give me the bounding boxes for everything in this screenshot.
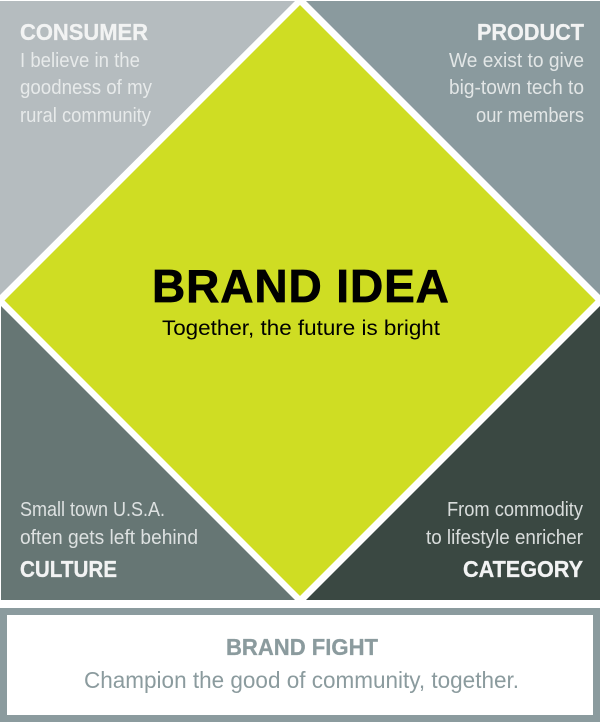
- text: product statement: big-town tech to: [449, 77, 584, 99]
- text: product statement: [449, 50, 584, 127]
- heading: brand fight: BRAND FIGHT: [226, 634, 378, 660]
- title: brand idea: BRAND IDEA: [152, 260, 450, 312]
- text: consumer statement: goodness of my: [20, 77, 152, 99]
- text: category statement: From commodity: [447, 499, 583, 521]
- text: product statement: We exist to give: [449, 50, 584, 72]
- text: consumer statement: [20, 50, 152, 127]
- text: culture statement: [20, 499, 198, 549]
- panel: consumer: [0, 1, 295, 295]
- heading: product: PRODUCT: [477, 19, 584, 45]
- panel: culture: [1, 306, 295, 600]
- heading: consumer: CONSUMER: [20, 19, 148, 45]
- subtitle: brand idea statement: Together, the future is bright: [162, 317, 440, 340]
- heading: category: CATEGORY: [463, 556, 583, 582]
- text: consumer statement: I believe in the: [20, 50, 140, 72]
- heading: culture: CULTURE: [20, 556, 117, 582]
- panel: category: [306, 306, 600, 600]
- text: category statement: [426, 499, 583, 549]
- text: product statement: our members: [476, 105, 584, 127]
- text: brand fight statement: Champion the good of community, together.: [84, 667, 519, 693]
- panel: brand fight: [4, 612, 596, 718]
- text: culture statement: often gets left behind: [20, 527, 198, 549]
- text: consumer statement: rural community: [20, 105, 151, 127]
- text: culture statement: Small town U.S.A.: [20, 499, 165, 521]
- panel: product: [306, 1, 600, 295]
- text: category statement: to lifestyle enricher: [426, 527, 583, 549]
